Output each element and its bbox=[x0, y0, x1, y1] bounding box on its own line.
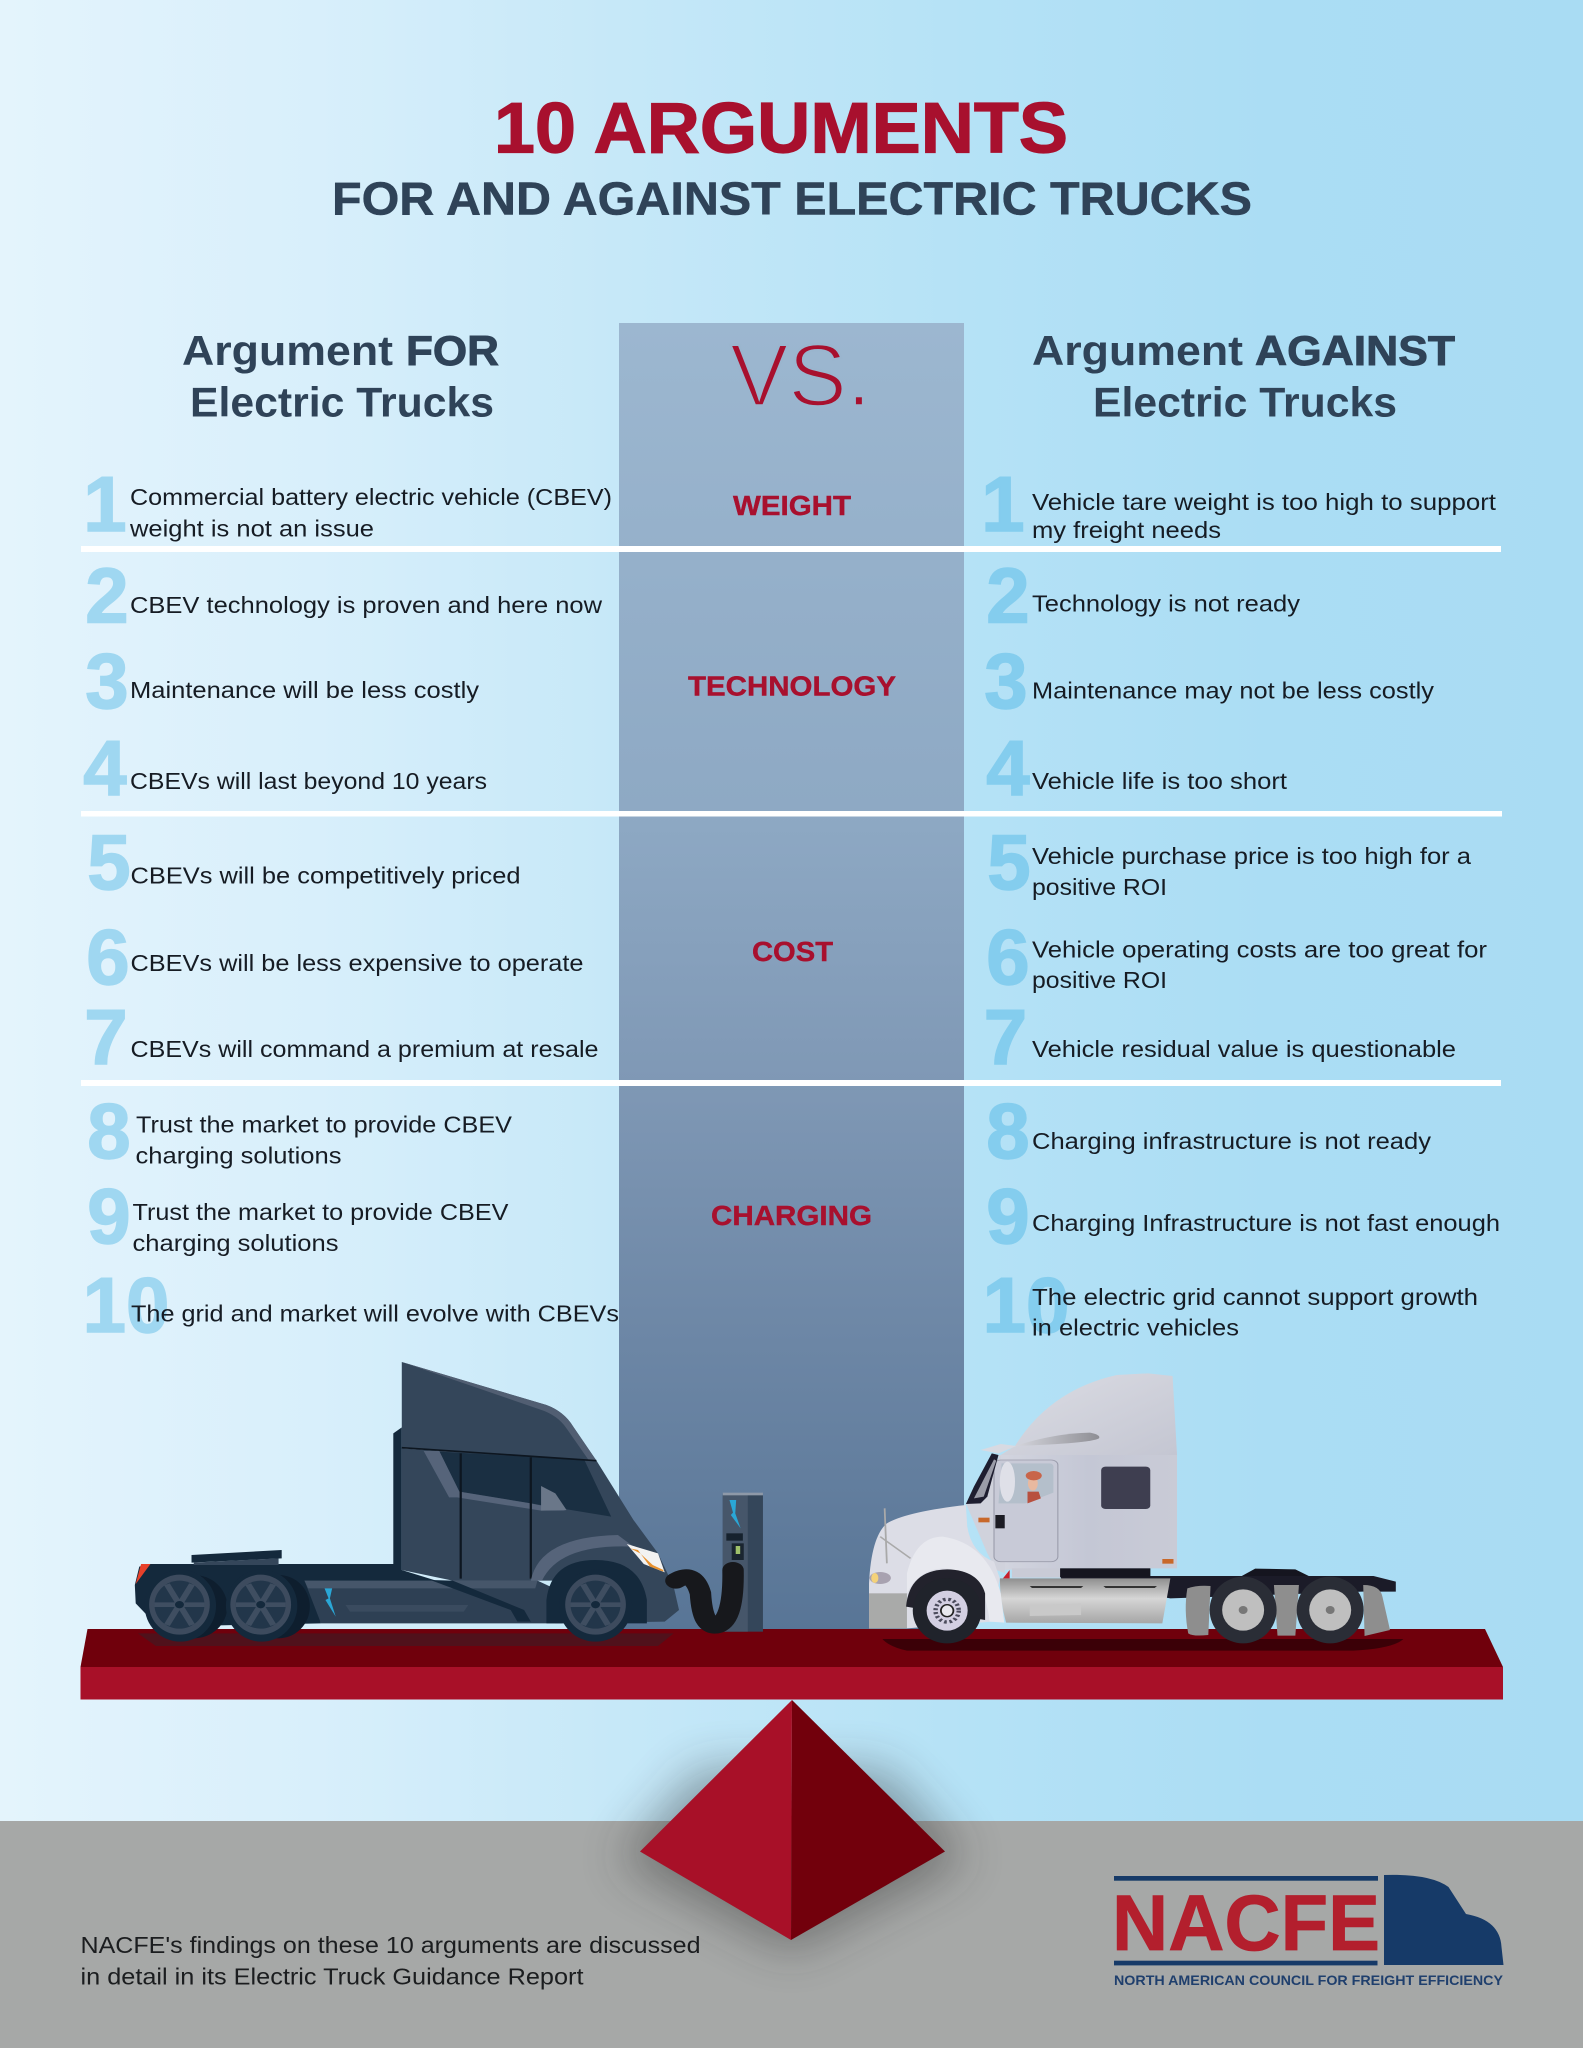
argument for 1: 1 bbox=[83, 460, 127, 548]
argument for 5 bbox=[87, 818, 520, 906]
argument for 6: CBEVs will be less expensive to operate bbox=[130, 950, 584, 976]
argument for 2: 2 bbox=[85, 552, 129, 640]
argument against 4: Vehicle life is too short bbox=[1032, 768, 1288, 794]
argument against 6: positive ROI bbox=[1032, 967, 1167, 993]
heading: argument against: Argument bbox=[1032, 327, 1243, 374]
argument for 8: 8 bbox=[87, 1087, 131, 1175]
heading: argument against bbox=[1032, 327, 1455, 426]
argument against 9: 9 bbox=[986, 1172, 1030, 1260]
argument for 10 bbox=[83, 1261, 619, 1349]
argument against 10 bbox=[983, 1261, 1478, 1349]
argument against 5: 5 bbox=[987, 818, 1031, 906]
argument for 8: Trust the market to provide CBEV bbox=[136, 1111, 512, 1137]
heading: argument for: Electric Trucks bbox=[190, 378, 494, 426]
argument for 4 bbox=[83, 724, 487, 812]
column: arguments against bbox=[981, 460, 1500, 1349]
category: charging: CHARGING bbox=[711, 1200, 872, 1231]
argument against 5 bbox=[987, 818, 1472, 906]
argument for 1: Commercial battery electric vehicle (CBEV) bbox=[130, 484, 612, 510]
argument against 9 bbox=[986, 1172, 1500, 1260]
footer band bbox=[0, 1821, 1583, 2048]
VS label: VS. bbox=[730, 326, 871, 424]
argument for 7 bbox=[84, 993, 598, 1081]
argument against 8: Charging infrastructure is not ready bbox=[1032, 1128, 1431, 1154]
argument for 4: 4 bbox=[83, 724, 127, 812]
argument against 3 bbox=[984, 637, 1434, 725]
argument against 1: my freight needs bbox=[1032, 517, 1221, 543]
argument for 6 bbox=[86, 913, 584, 1001]
argument for 8 bbox=[87, 1087, 512, 1175]
argument against 4 bbox=[986, 724, 1288, 812]
argument against 8 bbox=[986, 1087, 1431, 1175]
category: cost: COST bbox=[752, 936, 833, 967]
argument for 10: 10 bbox=[83, 1261, 169, 1349]
heading: argument against: AGAINST bbox=[1255, 327, 1455, 374]
category: technology: TECHNOLOGY bbox=[688, 671, 896, 702]
argument for 1 bbox=[83, 460, 612, 548]
argument against 5: Vehicle purchase price is too high for a bbox=[1032, 843, 1472, 869]
argument against 6: 6 bbox=[986, 913, 1030, 1001]
heading: argument for: Argument bbox=[182, 327, 393, 374]
electric truck bbox=[135, 1362, 679, 1646]
argument against 2 bbox=[986, 552, 1300, 640]
argument against 3: Maintenance may not be less costly bbox=[1032, 677, 1434, 703]
argument against 8: 8 bbox=[986, 1087, 1030, 1175]
argument against 6: Vehicle operating costs are too great for bbox=[1032, 937, 1487, 963]
column: arguments for bbox=[83, 460, 619, 1349]
heading: argument for bbox=[182, 327, 499, 426]
argument for 5: 5 bbox=[87, 818, 131, 906]
pyramid fulcrum bbox=[640, 1700, 945, 1940]
argument for 3: Maintenance will be less costly bbox=[130, 677, 479, 703]
argument for 7: CBEVs will command a premium at resale bbox=[130, 1036, 598, 1062]
argument against 1: Vehicle tare weight is too high to support bbox=[1032, 489, 1497, 515]
argument for 3: 3 bbox=[85, 637, 129, 725]
argument against 1: 1 bbox=[981, 460, 1025, 548]
charging station bbox=[676, 1493, 763, 1632]
argument against 2: 2 bbox=[986, 552, 1030, 640]
argument against 3: 3 bbox=[984, 637, 1028, 725]
argument against 10: in electric vehicles bbox=[1032, 1314, 1239, 1340]
argument for 9: charging solutions bbox=[132, 1230, 338, 1256]
footer note bbox=[80, 1932, 700, 1989]
argument for 7: 7 bbox=[84, 993, 128, 1081]
balance platform bbox=[80, 1629, 1503, 1700]
title bbox=[332, 90, 1252, 224]
argument against 10: The electric grid cannot support growth bbox=[1032, 1284, 1478, 1310]
argument for 2 bbox=[85, 552, 603, 640]
category: weight: WEIGHT bbox=[733, 490, 851, 521]
NACFE logo: NACFE bbox=[1112, 1878, 1380, 1967]
argument against 7 bbox=[984, 993, 1456, 1081]
argument for 9 bbox=[87, 1172, 509, 1260]
argument for 9: 9 bbox=[87, 1172, 131, 1260]
argument for 5: CBEVs will be competitively priced bbox=[130, 863, 520, 889]
argument against 9: Charging Infrastructure is not fast enough bbox=[1032, 1210, 1500, 1236]
argument for 10: The grid and market will evolve with CBEVs bbox=[131, 1300, 619, 1326]
NACFE logo bbox=[1112, 1875, 1504, 1988]
argument for 4: CBEVs will last beyond 10 years bbox=[130, 768, 487, 794]
argument for 8: charging solutions bbox=[136, 1142, 342, 1168]
argument for 3 bbox=[85, 637, 479, 725]
argument against 4: 4 bbox=[986, 724, 1030, 812]
argument against 2: Technology is not ready bbox=[1032, 591, 1300, 617]
heading: argument for: FOR bbox=[406, 327, 499, 374]
argument for 6: 6 bbox=[86, 913, 130, 1001]
argument against 5: positive ROI bbox=[1032, 874, 1167, 900]
argument for 2: CBEV technology is proven and here now bbox=[130, 592, 603, 618]
center VS panel bbox=[619, 323, 964, 1633]
title: FOR AND AGAINST ELECTRIC TRUCKS bbox=[332, 172, 1252, 224]
argument for 9: Trust the market to provide CBEV bbox=[132, 1199, 509, 1225]
argument for 1: weight is not an issue bbox=[129, 515, 374, 541]
argument against 7: 7 bbox=[984, 993, 1027, 1081]
heading: argument against: Electric Trucks bbox=[1093, 378, 1397, 426]
NACFE logo: NORTH AMERICAN COUNCIL FOR FREIGHT EFFICIENCY bbox=[1114, 1972, 1504, 1988]
argument against 6 bbox=[986, 913, 1487, 1001]
pyramid shadow bbox=[620, 1770, 965, 1950]
diesel truck bbox=[869, 1373, 1403, 1651]
argument against 1 bbox=[981, 460, 1497, 548]
argument against 10: 10 bbox=[983, 1261, 1069, 1349]
footer note: in detail in its Electric Truck Guidance Report bbox=[80, 1963, 584, 1989]
argument against 7: Vehicle residual value is questionable bbox=[1032, 1036, 1456, 1062]
footer note: NACFE's findings on these 10 arguments are discussed bbox=[80, 1932, 700, 1958]
title: 10 ARGUMENTS bbox=[494, 90, 1068, 169]
